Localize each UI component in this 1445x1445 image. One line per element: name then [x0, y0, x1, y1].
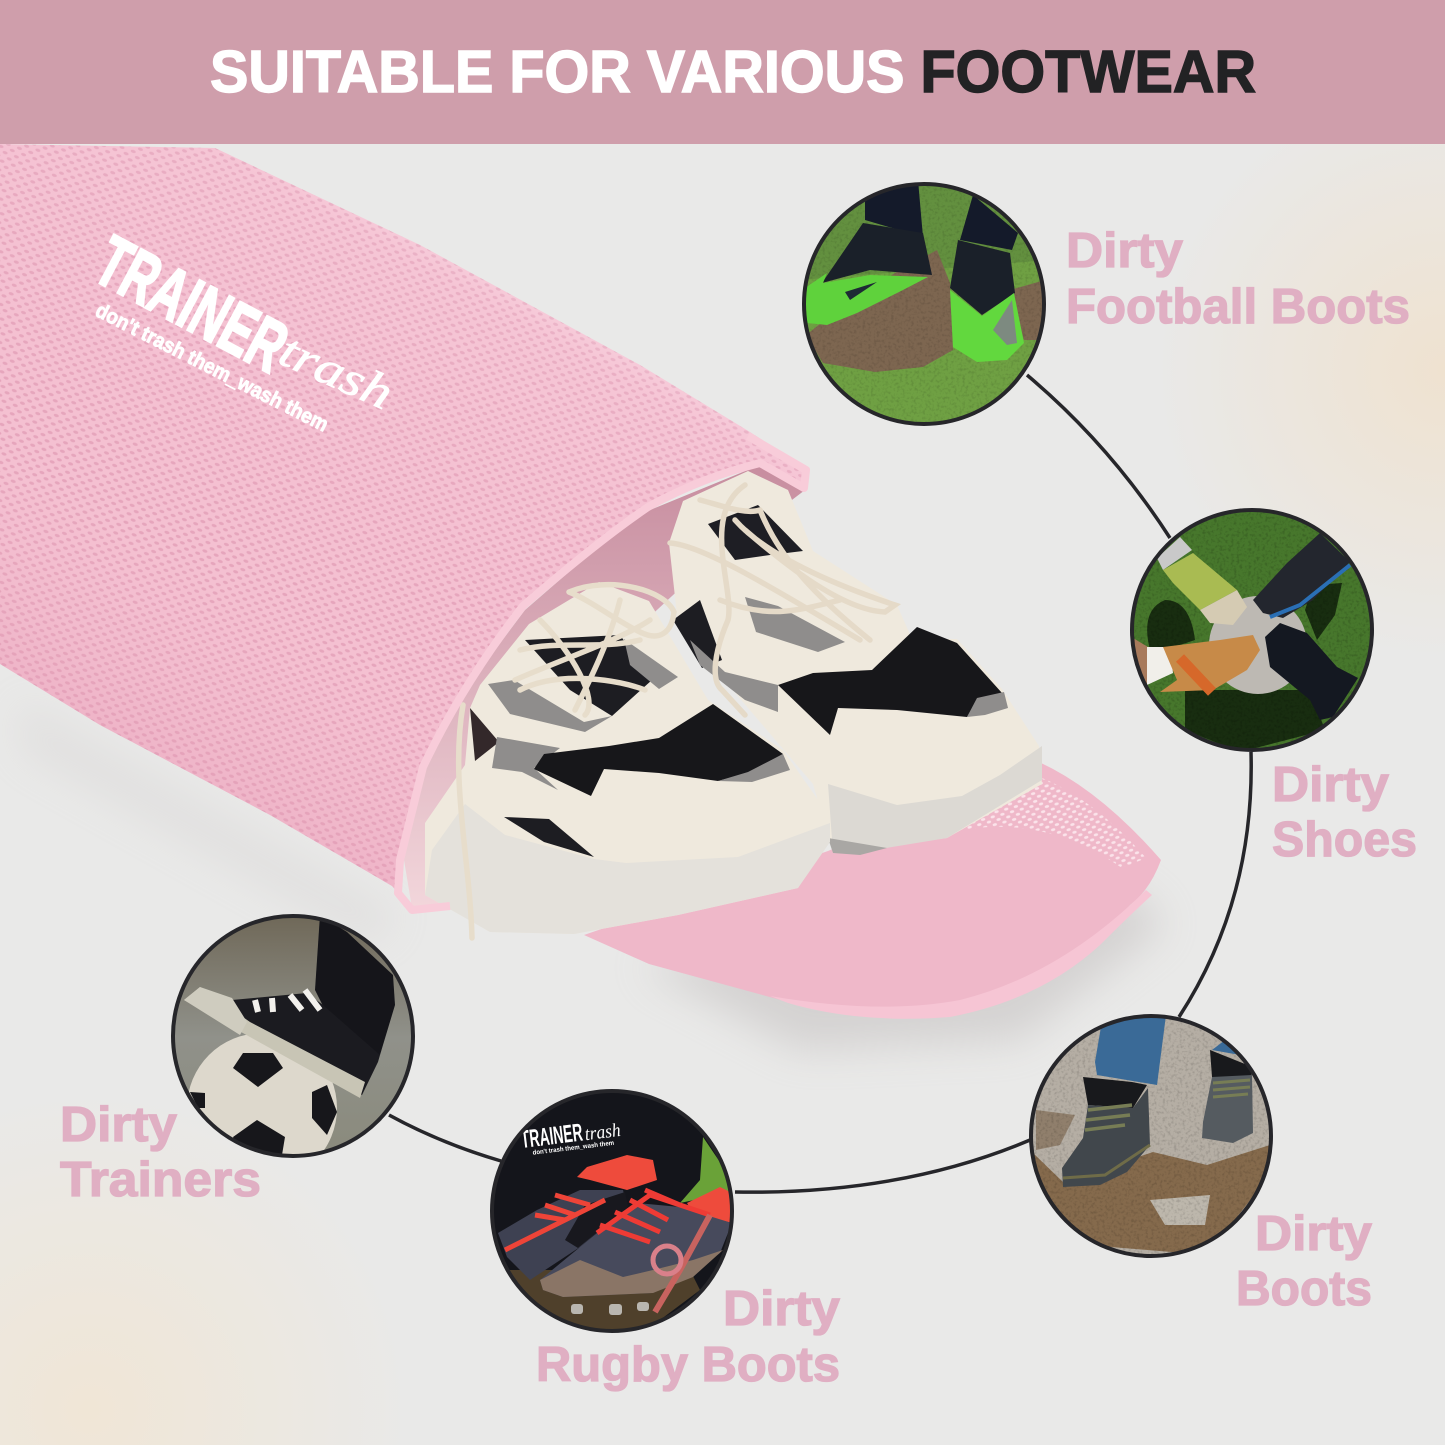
back shoe collar shadow: [708, 505, 803, 560]
left jeans: [1095, 1015, 1166, 1085]
blue dark shoe: [1253, 533, 1350, 618]
label: dirty rugby boots: Rugby Boots: [536, 1338, 840, 1392]
left boot collar: [1083, 1077, 1147, 1108]
pink swirl: [653, 1246, 681, 1274]
leg: [315, 915, 395, 1055]
front shoe black mesh: [534, 704, 783, 796]
right boot green: [950, 290, 1024, 362]
left boot collar: [577, 1155, 657, 1190]
mud: [806, 250, 1045, 372]
pink mesh shoe bag with shoes: [0, 144, 1165, 1050]
trainer laces: [255, 990, 320, 1012]
grass: [680, 1137, 732, 1203]
trainer sole: [184, 987, 365, 1098]
right leg: [960, 195, 1018, 250]
label: dirty boots: Dirty: [1255, 1207, 1372, 1261]
header band: [0, 0, 1445, 144]
front shoe upper: [425, 582, 830, 934]
frame: boots photo: [1031, 1016, 1271, 1256]
photo: dirty shoes: [1130, 508, 1375, 753]
front shoe grey trim: [718, 754, 790, 782]
grass texture: [808, 186, 1042, 422]
flap zipper band: [770, 890, 1152, 1019]
trainer body: [232, 993, 380, 1095]
frame: shoes photo: [1132, 510, 1372, 750]
trainer toe: [184, 987, 247, 1035]
grass texture: [1130, 508, 1375, 753]
back shoe grey side: [690, 640, 778, 712]
label: dirty shoes: [1272, 758, 1417, 867]
yellow shoe: [1163, 553, 1237, 610]
white sock: [1157, 537, 1192, 570]
flap mesh patch: [962, 778, 1146, 868]
front shoe right lace panel: [624, 639, 678, 689]
title: SUITABLE FOR VARIOUS FOOTWEAR: [210, 39, 1256, 105]
yellow shoe toe: [1200, 590, 1247, 625]
right boot mud: [540, 1250, 723, 1297]
left boot green: [805, 273, 928, 325]
right boot swoosh: [993, 300, 1017, 345]
logo wordmark: TRAINER: [82, 221, 300, 388]
left boot swoosh: [845, 282, 877, 300]
label: dirty football boots: [1066, 224, 1410, 334]
back shoe: [669, 471, 1042, 855]
orange shoe: [1160, 635, 1260, 692]
front shoe grey side: [492, 737, 560, 790]
frame: football boots photo: [804, 184, 1044, 424]
back shoe lace panel: [745, 597, 845, 652]
leg: [1133, 638, 1148, 685]
front shoe: [425, 582, 830, 938]
label: dirty football boots: Dirty: [1066, 224, 1183, 278]
bag shadow: [20, 700, 400, 945]
back shoe midsole: [828, 746, 1042, 853]
left leg: [865, 186, 923, 233]
bag inner opening: [404, 465, 805, 908]
logo tagline: don't trash them_wash them: [92, 299, 332, 437]
gravel ground: [510, 1270, 700, 1329]
ball panels: [190, 1053, 337, 1155]
right jeans: [1212, 1042, 1236, 1054]
studs: [571, 1302, 649, 1315]
mud texture: [1030, 1015, 1275, 1260]
back shoe laces: [670, 485, 895, 715]
back shoe under sole: [828, 838, 887, 855]
grass shadows: [1147, 583, 1342, 752]
left boot body: [498, 1190, 627, 1280]
right boot body: [540, 1203, 732, 1297]
wet mud: [1030, 1145, 1270, 1255]
back shoe grey trim: [967, 692, 1008, 717]
label: dirty rugby boots: Dirty: [723, 1282, 840, 1336]
bag body: [0, 144, 808, 895]
label: dirty trainers: [60, 1098, 261, 1207]
photo: dirty rugby boots: [490, 1090, 735, 1335]
back shoe upper: [669, 471, 1042, 853]
sock: [1147, 647, 1173, 685]
photo: dirty boots: [1030, 1015, 1275, 1260]
right boot: [1202, 1075, 1253, 1143]
label: dirty trainers: Trainers: [60, 1153, 261, 1207]
right boot upper: [950, 240, 1015, 315]
football: [1209, 596, 1307, 694]
label: dirty boots: Boots: [1236, 1262, 1372, 1316]
dark shoe: [1265, 623, 1358, 720]
right boot collar: [1210, 1050, 1252, 1077]
connector arc: [389, 375, 1251, 1192]
logo in photo: TRAINER: [519, 1119, 584, 1154]
flap shadow: [640, 890, 1165, 1050]
front shoe heel lining: [470, 708, 499, 761]
logo in photo: trash: [584, 1120, 622, 1145]
logo in photo: don't trash them_wash them: [532, 1140, 615, 1157]
logo script: trash: [272, 324, 401, 420]
label: dirty shoes: Dirty: [1272, 758, 1389, 812]
back shoe dark gap: [673, 600, 722, 668]
front shoe tongue gap: [525, 635, 652, 716]
front shoe lace panel: [488, 680, 612, 732]
frame: rugby boots photo: [492, 1091, 732, 1331]
photo: dirty football boots: [806, 186, 1042, 422]
label: dirty shoes: Shoes: [1272, 813, 1417, 867]
left boot laces: [505, 1195, 605, 1250]
label: dirty boots: [1236, 1207, 1372, 1316]
open bag flap: [584, 762, 1161, 1018]
bag body shading: [0, 144, 808, 895]
left boot: [1062, 1088, 1150, 1187]
front shoe laces: [459, 585, 674, 938]
left boot upper: [822, 223, 932, 283]
back shoe black mesh: [778, 627, 1002, 735]
photo: dirty trainers: [170, 915, 415, 1183]
football: [187, 1033, 337, 1183]
label: dirty trainers: Dirty: [60, 1098, 177, 1152]
front shoe midsole: [425, 804, 830, 934]
right boot laces: [597, 1190, 710, 1242]
label: dirty rugby boots: [536, 1282, 840, 1392]
zipper rim: [398, 436, 806, 910]
frame: trainers photo: [173, 916, 413, 1156]
bag brand logo: [82, 221, 401, 437]
label: dirty football boots: Football Boots: [1066, 280, 1410, 334]
front shoe side mesh: [504, 817, 594, 857]
right boot collar: [687, 1187, 732, 1223]
